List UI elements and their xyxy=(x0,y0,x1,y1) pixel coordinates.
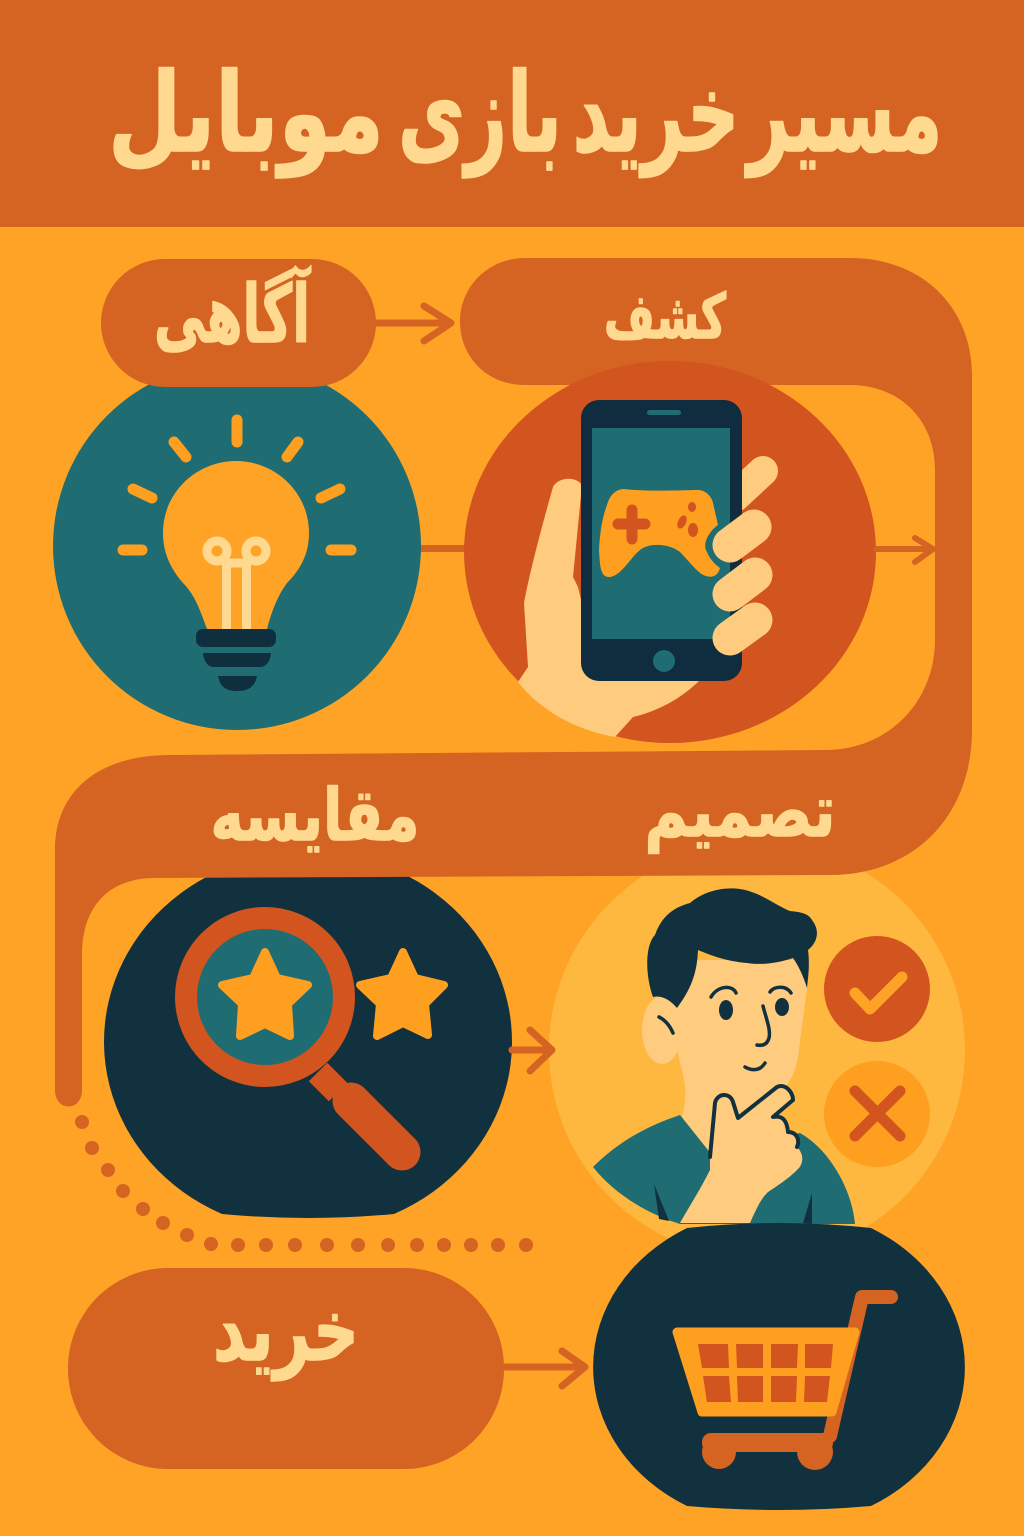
label: comparison: مقایسه xyxy=(210,773,420,857)
cart handle and frame xyxy=(830,1297,891,1436)
dotted connector xyxy=(75,1115,533,1252)
phone home button xyxy=(653,650,675,672)
phone screen xyxy=(592,428,730,639)
icon: phone in hand circle xyxy=(464,361,876,743)
star in lens xyxy=(222,952,308,1036)
title: بازی xyxy=(398,49,562,178)
label: decision: تصمیم xyxy=(644,769,836,854)
shirt fold lines xyxy=(654,1184,812,1224)
pill: awareness xyxy=(101,259,376,387)
bulb rays xyxy=(123,420,351,550)
phone body xyxy=(581,400,742,681)
header banner xyxy=(0,0,1024,227)
fingers xyxy=(730,527,755,638)
icon: thinking person circle xyxy=(549,842,965,1258)
cart bottom bar xyxy=(702,1433,833,1452)
bulb glass xyxy=(163,461,309,629)
label: discovery: کشف xyxy=(604,280,727,353)
facial features xyxy=(659,987,791,1070)
check badge xyxy=(824,936,930,1042)
person torso xyxy=(593,1115,855,1224)
arrow: purchase to cart xyxy=(504,1351,585,1386)
icon: shopping cart circle xyxy=(593,1223,965,1510)
magnifier neck xyxy=(318,1072,338,1092)
cart wheels xyxy=(702,1435,736,1469)
label: awareness: آگاهی xyxy=(154,265,311,361)
icon: light bulb circle xyxy=(53,362,421,730)
title xyxy=(108,49,942,178)
bulb base xyxy=(196,629,276,691)
game controller xyxy=(599,489,720,577)
thinking hand xyxy=(680,1086,802,1223)
cart basket xyxy=(677,1332,855,1412)
ear xyxy=(642,996,682,1064)
phone speaker xyxy=(647,410,681,415)
icon: magnifier circle xyxy=(104,852,512,1218)
label: purchase: خرید xyxy=(213,1281,359,1381)
basket grid xyxy=(698,1344,833,1402)
arrow: comparison to decision xyxy=(512,1030,552,1071)
serpentine path band xyxy=(55,258,972,1106)
hand palm xyxy=(518,479,700,737)
index finger behind phone xyxy=(735,471,763,497)
arrow: awareness to discovery xyxy=(376,306,451,341)
pill: purchase xyxy=(68,1268,504,1469)
hair xyxy=(647,888,817,1008)
star outside lens xyxy=(360,952,444,1036)
cross badge xyxy=(824,1061,930,1167)
title: خرید xyxy=(572,49,740,178)
magnifier lens xyxy=(186,918,344,1076)
arrow: phone to path xyxy=(876,538,933,562)
face and neck xyxy=(670,960,807,1155)
connector: bulb to phone xyxy=(420,545,470,552)
title: موبایل xyxy=(108,49,384,178)
hand outline xyxy=(710,1086,798,1157)
bulb filament xyxy=(207,541,266,629)
magnifier handle xyxy=(351,1101,402,1152)
